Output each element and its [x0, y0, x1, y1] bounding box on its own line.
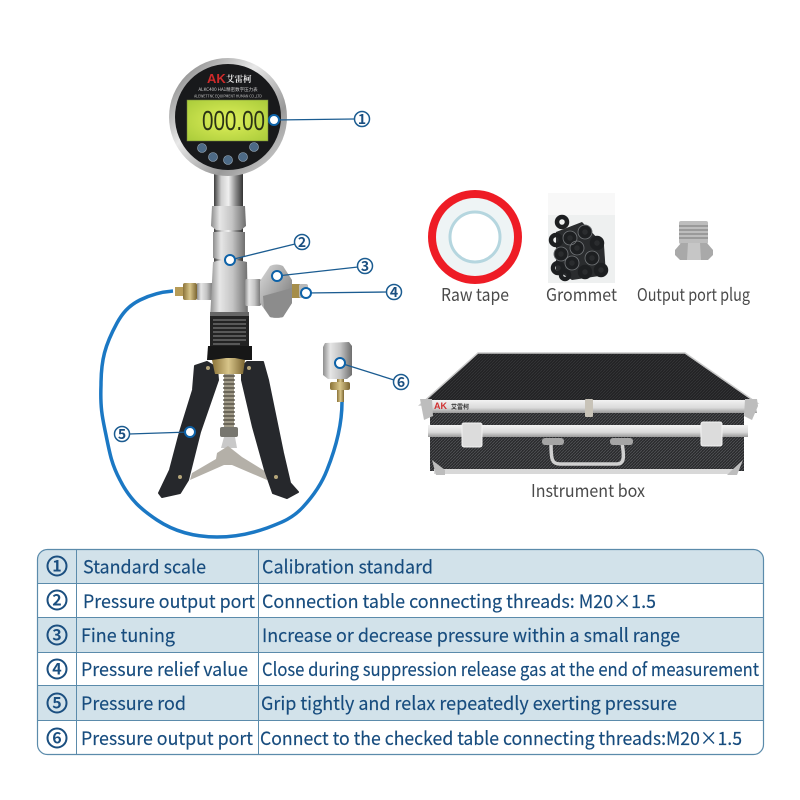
row 1: Standard scale	[83, 554, 206, 580]
LCD reading: 000.00	[202, 105, 265, 136]
callout 3	[272, 256, 372, 281]
raw tape	[428, 190, 522, 284]
table grid	[37, 549, 764, 754]
box logo	[434, 401, 469, 411]
lower hex block	[213, 232, 245, 262]
table border	[38, 550, 764, 754]
gauge	[169, 58, 287, 176]
label: output port plug: Output port plug	[637, 282, 750, 307]
callout 2	[225, 232, 310, 265]
row 4: Close during suppression release gas at the end of measurement	[262, 656, 759, 682]
callout 2: 2	[298, 232, 306, 252]
box logo: AK	[434, 401, 447, 411]
gauge bezel	[169, 58, 287, 176]
callout 1	[269, 109, 370, 129]
output port adapter	[323, 342, 352, 402]
row 2: Pressure output port	[83, 588, 255, 614]
left handle	[159, 362, 218, 497]
grommet bag	[548, 193, 615, 283]
right handle	[242, 362, 298, 498]
gauge logo: AK	[207, 71, 226, 86]
instrument box	[420, 353, 758, 475]
callout 5: 5	[118, 424, 126, 444]
box handle	[542, 438, 633, 464]
box logo: 艾雷柯	[451, 402, 469, 411]
black collar	[207, 346, 252, 360]
row 2: 2	[52, 586, 62, 610]
callout 6	[335, 358, 408, 392]
middle metal band	[428, 425, 748, 437]
row 4: Pressure relief value	[81, 656, 248, 682]
spring and piston	[220, 372, 238, 448]
gauge buttons	[198, 142, 258, 164]
row 3: 3	[52, 622, 62, 646]
gauge face	[175, 64, 281, 170]
gauge logo	[207, 71, 252, 86]
label: instrument box: Instrument box	[531, 478, 645, 503]
row 6: 6	[52, 724, 62, 748]
box lower dark panels	[430, 413, 744, 471]
Y-shaped foot plate	[190, 446, 268, 480]
hose: blue pressure tube	[101, 291, 342, 537]
row 5	[48, 690, 677, 716]
left side fitting	[175, 283, 213, 300]
row 6: Pressure output port	[81, 725, 253, 751]
stem	[214, 174, 243, 264]
callout 6: 6	[397, 372, 405, 392]
LCD display	[187, 100, 268, 141]
label: grommet: Grommet	[546, 282, 617, 307]
table	[37, 549, 764, 754]
gauge model text: ALKC400 HA1精密数字压力表	[198, 86, 258, 93]
corner brackets	[420, 399, 758, 475]
row 3	[48, 622, 680, 648]
table row backgrounds	[37, 549, 764, 720]
main body cylinder	[210, 260, 248, 320]
right fine tuning knob	[245, 264, 308, 318]
row 5: 5	[52, 690, 62, 714]
callout 1: 1	[358, 109, 366, 129]
centre clasp	[585, 399, 593, 417]
callout 5	[114, 424, 195, 444]
row 1: Calibration standard	[262, 554, 433, 580]
row 3: Increase or decrease pressure within a small range	[262, 622, 680, 648]
row 5: Pressure rod	[81, 690, 186, 716]
row 2	[48, 586, 656, 614]
row 4: 4	[52, 656, 62, 680]
row 4	[48, 656, 759, 682]
brass yoke	[212, 358, 245, 374]
row 2: Connection table connecting threads: M20×1.5	[262, 588, 656, 614]
specification plate	[210, 316, 249, 348]
output port plug	[675, 221, 713, 260]
row 6	[48, 724, 742, 751]
callout 3: 3	[361, 256, 369, 276]
row 3: Fine tuning	[81, 622, 176, 648]
callout 4: 4	[390, 282, 398, 302]
callout 4	[301, 282, 402, 302]
row 1: 1	[52, 552, 62, 576]
box lid top	[420, 353, 757, 405]
lid metal band	[423, 400, 757, 413]
row 1	[48, 552, 433, 580]
bottom trim	[434, 469, 735, 474]
handle rivets	[178, 366, 278, 479]
row 6: Connect to the checked table connecting threads:M20×1.5	[260, 725, 742, 751]
gauge logo: 艾雷柯	[226, 73, 252, 85]
upper hex nut	[211, 206, 246, 230]
left latch	[462, 423, 482, 447]
label: raw tape: Raw tape	[441, 282, 509, 307]
row 5: Grip tightly and relax repeatedly exerting pressure	[261, 690, 677, 716]
gauge company text: ALEWETTNC EQUIPMENT HUMAN CO.,LTD	[194, 94, 262, 100]
pump assembly: stem, body and handles	[159, 174, 308, 498]
right latch	[701, 422, 722, 446]
